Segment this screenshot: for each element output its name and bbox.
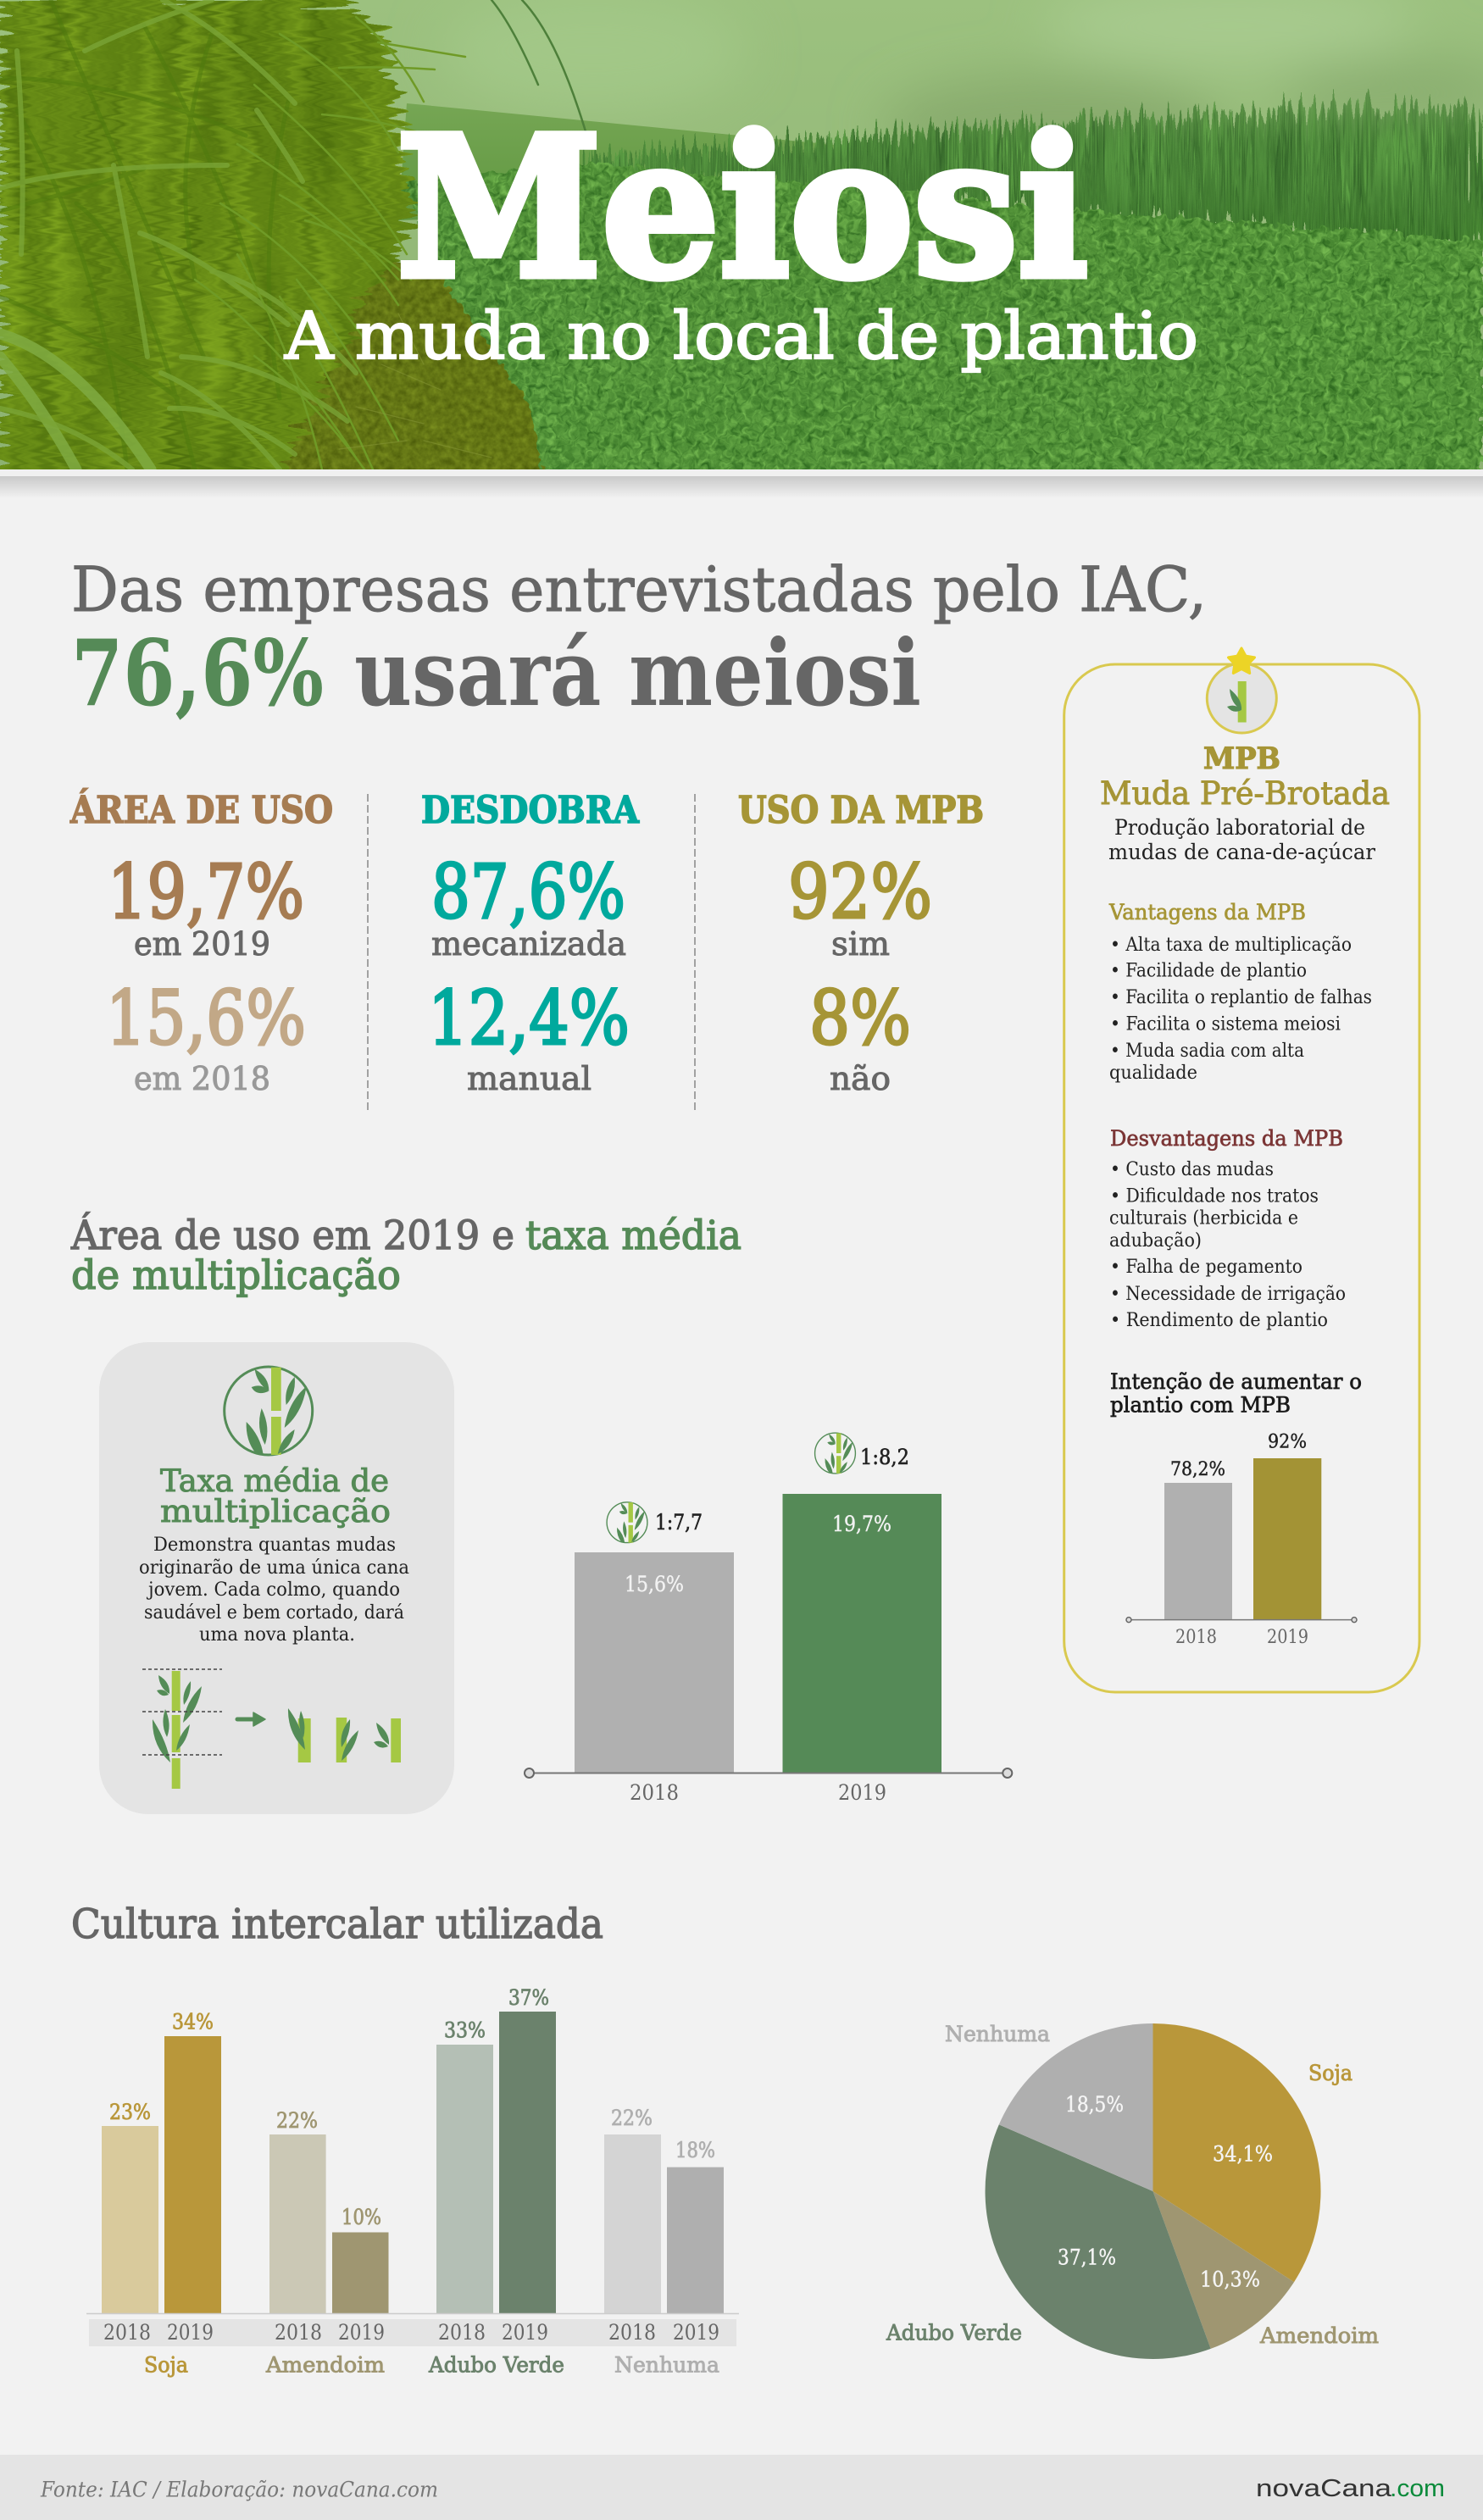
pie slice values [1058,2092,1273,2292]
stat column: desdobra: 12,4% [428,974,630,1062]
desvantagens: culturais (herbicida e [1109,1207,1298,1229]
icon: bamboo [225,1367,313,1455]
year labels: 2018 [275,2320,322,2345]
headline: Das empresas entrevistadas pelo IAC, [71,554,1207,626]
stat column: desdobra: manual [467,1060,592,1097]
stat column: uso da MPB: sim [831,925,890,963]
icon: bamboo ratio 2018 [607,1502,647,1543]
pie category labels: Amendoim [1259,2323,1379,2348]
pie slice values: 10,3% [1200,2267,1260,2292]
pie category labels: Adubo Verde [886,2321,1022,2345]
header shadow strip [0,469,1483,498]
stat column: desdobra: mecanizada [431,925,626,963]
category labels [144,2352,719,2378]
arrow [237,1712,265,1726]
hero banner: sugarcane field photo [0,0,1483,508]
title: Meiosi [397,94,1088,321]
bar values: 22% [276,2108,318,2133]
panel subtitle [1108,815,1375,864]
stat column: área de uso: em 2019 [134,925,270,963]
category labels: Nenhuma [614,2352,719,2378]
stat column: desdobra: 87,6% [431,848,625,935]
stat column: área de uso: 19,7% [108,848,304,935]
bar values: 10% [342,2205,381,2229]
footer [0,2455,1483,2520]
stat column: área de uso: em 2018 [134,1060,270,1097]
panel title [160,1464,391,1529]
bar chart: cultura intercalar [86,1985,739,2378]
bar values: 37% [508,1985,549,2010]
year labels: 2018 [438,2320,486,2345]
pie category labels [886,2022,1379,2348]
vantagens: Vantagens da MPB [1108,900,1306,924]
vantagens: • Alta taxa de multiplicação [1110,934,1352,956]
ratio 2019: 1:8,2 [860,1445,909,1469]
desvantagens: • Falha de pegamento [1110,1256,1302,1278]
pie slice values: 37,1% [1058,2245,1116,2270]
stat column: uso da MPB: 92% [788,848,932,935]
desvantagens: adubação) [1109,1229,1202,1252]
bar values [109,1985,715,2229]
year labels: 2018 [608,2320,656,2345]
pie category labels: Nenhuma [945,2022,1050,2046]
vantagens [1108,900,1372,1084]
bar values: 22% [611,2106,653,2130]
bar chart: área de uso em 2019 [525,1433,1012,1805]
panel description: originarão de uma única cana [139,1557,409,1579]
bar chart: intenção de aumentar: 2019 [1267,1627,1308,1648]
panel title [1100,741,1390,812]
desvantagens: • Dificuldade nos tratos [1110,1185,1319,1207]
headline: usará meiosi [354,620,921,727]
illustration: cutting the stalk [142,1669,222,1789]
bar values: 23% [109,2100,151,2124]
desvantagens: Desvantagens da MPB [1110,1126,1343,1151]
panel description: jovem. Cada colmo, quando [146,1579,400,1601]
stat column: uso da MPB: não [830,1060,891,1097]
vantagens: qualidade [1109,1062,1197,1084]
pie slice values: 34,1% [1213,2142,1273,2167]
panel title: Muda Pré-Brotada [1100,775,1390,812]
headline: 76,6% [71,620,324,727]
intenção heading: plantio com MPB [1110,1392,1291,1417]
year labels: 2019 [502,2320,548,2345]
desvantagens: • Rendimento de plantio [1110,1309,1328,1331]
desvantagens: • Custo das mudas [1110,1158,1274,1180]
desvantagens [1109,1126,1346,1331]
stat column: uso da MPB: 8% [809,974,911,1062]
panel subtitle: mudas de cana-de-açúcar [1108,840,1375,864]
category labels: Adubo Verde [428,2352,564,2378]
bar chart: intenção de aumentar: 2018 [1175,1627,1217,1648]
bar value 2018: 15,6% [625,1572,684,1596]
panel subtitle: Produção laboratorial de [1114,815,1365,840]
year labels [103,2320,719,2345]
subtitle: A muda no local de plantio [284,299,1198,375]
vantagens: • Facilita o replantio de falhas [1110,986,1372,1008]
panel title: Taxa média de [160,1464,389,1499]
vantagens: • Facilita o sistema meiosi [1110,1013,1341,1035]
intenção heading [1110,1369,1362,1417]
desvantagens: • Necessidade de irrigação [1110,1283,1346,1305]
panel description [139,1535,409,1646]
logo: novaCana.com [1256,2475,1445,2502]
stat column: uso da MPB: USO DA MPB [738,789,984,832]
axis label 2018: 2018 [630,1780,679,1805]
category labels: Soja [144,2352,188,2378]
stat column: área de uso [69,787,333,1097]
stat column: área de uso: ÁREA DE USO [69,787,333,832]
intenção heading: Intenção de aumentar o [1110,1369,1362,1394]
pie category labels: Soja [1308,2061,1352,2085]
bar chart: intenção de aumentar [1126,1432,1357,1648]
heading: área de uso e taxa média: de multiplicação [71,1252,401,1299]
panel: MPB [1064,648,1419,1692]
panel description: uma nova planta. [199,1624,355,1646]
heading: área de uso e taxa média: taxa média [525,1213,742,1259]
bar values: 34% [172,2010,214,2034]
panel title: MPB [1203,741,1280,776]
year labels: 2019 [673,2320,719,2345]
icon: bamboo ratio 2019 [815,1433,855,1474]
year labels: 2019 [338,2320,385,2345]
ratio 2018: 1:7,7 [655,1510,703,1535]
axis label 2019: 2019 [838,1780,886,1805]
source credit: Fonte: IAC / Elaboração: novaCana.com [40,2478,438,2502]
stat column: desdobra: DESDOBRA [421,789,640,832]
logo: novaCana.com: .com [1390,2475,1445,2502]
heading: área de uso e taxa média [70,1212,742,1299]
stat column: uso da MPB [738,789,984,1097]
headline [71,554,1207,727]
divider [367,794,369,1111]
vantagens: • Facilidade de plantio [1110,959,1307,981]
bar values: 18% [675,2138,715,2162]
panel: taxa média de multiplicação [99,1342,454,1814]
bar chart: intenção de aumentar: 78,2% [1170,1459,1225,1480]
bar values: 33% [444,2018,486,2042]
stat column: área de uso: 15,6% [106,974,306,1062]
pie slice values: 18,5% [1065,2092,1124,2117]
year labels: 2019 [167,2320,214,2345]
divider [694,794,696,1111]
panel description: saudável e bem cortado, dará [144,1602,404,1624]
vantagens: • Muda sadia com alta [1110,1040,1304,1062]
logo: novaCana.com: novaCana [1256,2475,1392,2502]
panel description: Demonstra quantas mudas [153,1535,396,1556]
bar value 2019: 19,7% [832,1512,891,1536]
heading: área de uso e taxa média: Área de uso em 2019 e [70,1212,514,1259]
bar chart: intenção de aumentar: 92% [1268,1432,1307,1453]
heading: cultura intercalar: Cultura intercalar utilizada [71,1901,603,1948]
stat column: desdobra [421,789,640,1097]
panel title: multiplicação [160,1495,391,1529]
illustration: stalk cuttings [288,1708,401,1762]
icon: MPB seedling badge [1207,648,1276,733]
year labels: 2018 [103,2320,151,2345]
pie chart: cultura intercalar [886,2022,1379,2359]
category labels: Amendoim [265,2352,385,2378]
